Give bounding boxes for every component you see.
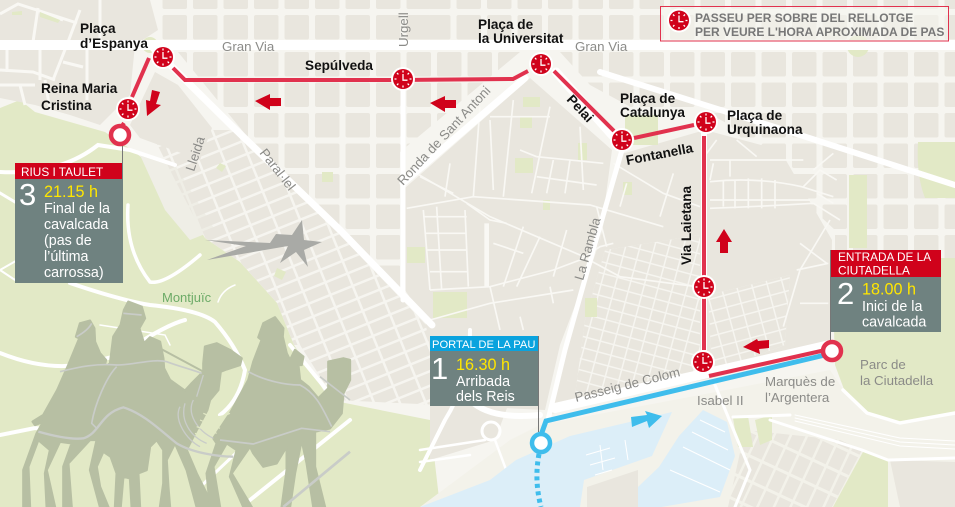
- port moorings: [586, 420, 730, 492]
- callout 1: Portal de la Pau: [430, 336, 538, 406]
- map labels: streets and districts: Isabel II: [697, 393, 744, 408]
- callout 3: Rius i Taulet: [15, 163, 123, 283]
- callout 3: Rius i Taulet: cavalcada: [44, 217, 108, 233]
- map labels: streets and districts: La Rambla: [571, 215, 604, 282]
- place names in bold: Fontanella: [625, 140, 695, 168]
- map labels: streets and districts: Marquès de: [765, 374, 835, 389]
- callout 1: Portal de la Pau: 1: [431, 351, 448, 386]
- place names in bold: d’Espanya: [80, 36, 148, 51]
- map labels: streets and districts: Urgell: [396, 12, 411, 47]
- city blocks: Eixample grid: [160, 0, 955, 290]
- place names in bold: Pelai: [564, 92, 596, 125]
- callout 3: Rius i Taulet: RIUS I TAULET: [21, 165, 103, 179]
- callout 1: Portal de la Pau: Arribada: [456, 374, 510, 390]
- callout 2: Entrada de la Ciutadella: 18.00 h: [862, 280, 916, 298]
- place names in bold: Plaça de: [727, 108, 783, 123]
- place names in bold: Plaça: [80, 21, 116, 36]
- place names in bold: Sepúlveda: [305, 58, 373, 73]
- map labels: streets and districts: Passeig de Colom: [573, 364, 681, 405]
- place names in bold: Reina Maria: [41, 81, 118, 96]
- map labels: streets and districts: Montjuïc: [162, 290, 212, 305]
- map labels: streets and districts: Lleida: [183, 134, 208, 173]
- legend: PER VEURE L'HORA APROXIMADA DE PAS: [695, 25, 944, 39]
- place names in bold: Catalunya: [620, 105, 685, 120]
- callout 2: Entrada de la Ciutadella: [831, 250, 941, 332]
- city blocks: Sants and Fira: [0, 0, 440, 405]
- place names in bold: Via Laietana: [679, 185, 694, 265]
- route: red section: [122, 58, 830, 376]
- legend: PASSEU PER SOBRE DEL RELLOTGE: [695, 11, 913, 25]
- place names in bold: Plaça de: [620, 91, 676, 106]
- place names in bold: Cristina: [41, 98, 92, 113]
- callout 2: Entrada de la Ciutadella: Inici de la: [862, 299, 922, 315]
- port water: [420, 410, 735, 507]
- gray star of Bethlehem: [205, 220, 322, 267]
- callout 3: Rius i Taulet: (pas de: [44, 233, 92, 249]
- raval street network: [407, 100, 700, 330]
- green areas: Montjuic: [0, 37, 440, 507]
- direction arrows: [146, 90, 769, 428]
- map labels: streets and districts: [162, 12, 934, 408]
- legend: [660, 6, 948, 41]
- place names in bold: Plaça de: [478, 17, 534, 32]
- callout 1: Portal de la Pau: 16.30 h: [456, 356, 510, 374]
- callout 1: Portal de la Pau: PORTAL DE LA PAU: [432, 339, 535, 351]
- map labels: streets and districts: la Ciutadella: [860, 373, 934, 388]
- place names in bold: la Universitat: [478, 31, 564, 46]
- leader lines: [122, 145, 830, 432]
- route end markers: [111, 126, 841, 452]
- callout 2: Entrada de la Ciutadella: 2: [837, 276, 854, 311]
- callout 3: Rius i Taulet: Final de la: [44, 201, 110, 217]
- map labels: streets and districts: Gran Via: [575, 39, 628, 54]
- map labels: streets and districts: l’Argentera: [765, 390, 830, 405]
- silhouette: three kings on camels: [23, 302, 350, 507]
- callout 1: Portal de la Pau: dels Reis: [456, 389, 515, 405]
- clock icons along the route: [116, 45, 718, 374]
- callout 2: Entrada de la Ciutadella: CIUTADELLA: [838, 264, 910, 278]
- map labels: streets and districts: Gran Via: [222, 39, 275, 54]
- city blocks: Raval and old town: [405, 78, 955, 507]
- map labels: streets and districts: Ronda de Sant Antoni: [394, 83, 493, 188]
- map labels: streets and districts: Paral·lel: [257, 146, 299, 193]
- route: blue section: [537, 355, 825, 507]
- map labels: streets and districts: Parc de: [860, 357, 906, 372]
- callout 3: Rius i Taulet: 3: [19, 177, 36, 212]
- callout 3: Rius i Taulet: l’última: [44, 249, 89, 265]
- place names in bold: Urquinaona: [727, 122, 803, 137]
- callout 2: Entrada de la Ciutadella: cavalcada: [862, 314, 926, 330]
- place names in bold: [41, 17, 803, 265]
- old town street network: [707, 140, 840, 327]
- callout 2: Entrada de la Ciutadella: ENTRADA DE LA: [838, 250, 931, 264]
- callout 3: Rius i Taulet: carrossa): [44, 265, 104, 281]
- callout 3: Rius i Taulet: 21.15 h: [44, 183, 98, 201]
- green parks over the blocks: [216, 35, 955, 507]
